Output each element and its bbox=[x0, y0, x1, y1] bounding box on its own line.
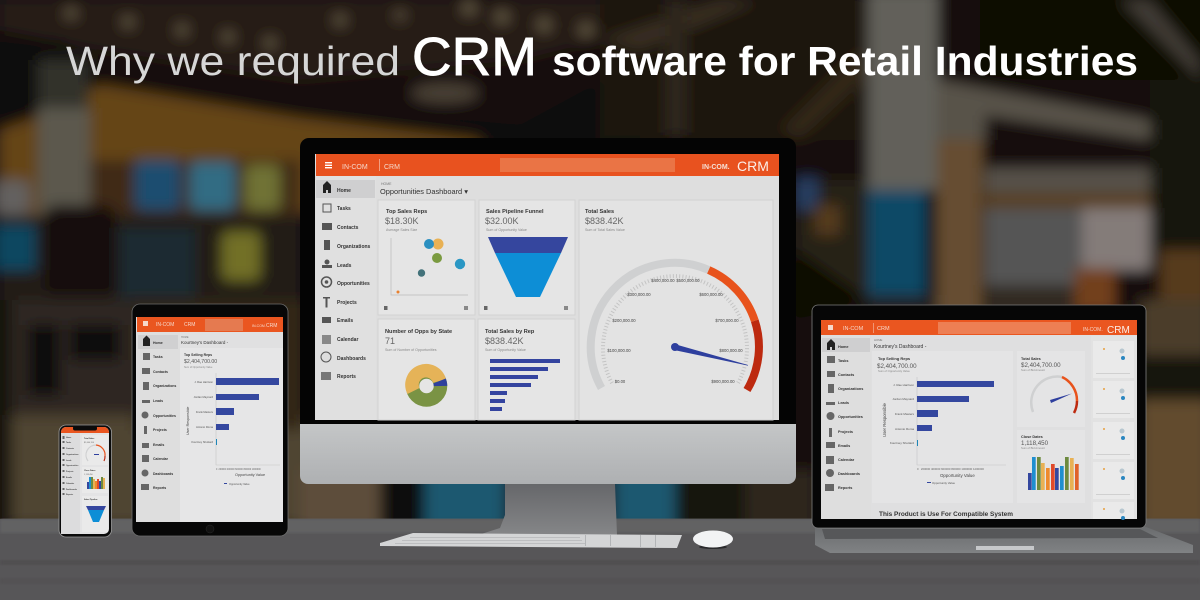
gauge chart: $900,000.00 bbox=[711, 379, 735, 384]
monitor chin bbox=[300, 424, 796, 484]
card: Total Sales gauge: $838.42K bbox=[585, 216, 624, 226]
card: Number of Opps by State: Number of Opps by State bbox=[385, 329, 452, 335]
tablet header: IN-COM. bbox=[252, 324, 266, 328]
tablet breadcrumb: HOME bbox=[181, 336, 189, 339]
tablet chart: Top Selling Reps: Frank Masters bbox=[196, 410, 214, 414]
device: desktop monitor bbox=[300, 138, 796, 535]
phone sidebar: Dashboards bbox=[66, 489, 77, 491]
phone header bbox=[61, 427, 109, 433]
laptop sidebar: Projects bbox=[838, 430, 853, 434]
title: CRM: CRM bbox=[412, 27, 537, 87]
laptop sidebar: Organizations bbox=[838, 387, 863, 391]
card: Top Sales Reps: Average Sales Size bbox=[386, 228, 417, 232]
laptop header: IN-COM. bbox=[1083, 327, 1103, 333]
monitor body bbox=[300, 138, 796, 484]
laptop keys bbox=[822, 529, 1158, 539]
sidebar navigation: Opportunities bbox=[337, 281, 370, 287]
laptop lid bbox=[812, 305, 1146, 528]
tablet chart: Top Selling Reps: Antonio Roma bbox=[196, 425, 214, 429]
laptop header bbox=[821, 320, 1137, 336]
title bbox=[66, 27, 1138, 87]
card: Sales Pipeline Funnel bbox=[479, 200, 575, 315]
tablet sidebar: Home bbox=[153, 341, 163, 345]
laptop thumbnails column bbox=[1091, 336, 1137, 520]
laptop sidebar bbox=[821, 335, 871, 519]
gauge chart: $0.00 bbox=[615, 379, 626, 384]
sidebar navigation: Home bbox=[337, 188, 351, 194]
title: bold words: software for Retail Industries bbox=[552, 38, 1138, 84]
tablet chart: Top Selling Reps: Opportunity Value bbox=[235, 473, 265, 477]
tablet breadcrumb: Kourtney's Dashboard - bbox=[181, 340, 229, 345]
tablet chart: Top Selling Reps: 0 200000 400000 600000 800000 1000000 bbox=[216, 469, 261, 471]
laptop card: Close Dates column chart: Close Dates bbox=[1021, 435, 1043, 439]
laptop card: Total Sales gauge: Total Sales bbox=[1021, 357, 1041, 361]
tablet sidebar: Contacts bbox=[153, 370, 168, 374]
app header bbox=[316, 154, 779, 176]
phone column chart bbox=[82, 467, 108, 493]
gauge chart: $500,000.00 bbox=[676, 278, 700, 283]
laptop sidebar: Contacts bbox=[838, 373, 854, 377]
laptop sidebar: Leads bbox=[838, 401, 849, 405]
laptop card: Total Sales gauge bbox=[1017, 351, 1085, 427]
tablet header: CRM bbox=[184, 322, 195, 328]
laptop card: Top Selling Reps bar chart: Kourtney Shuttard bbox=[890, 441, 914, 445]
sidebar navigation: Contacts bbox=[337, 225, 359, 231]
laptop card: Total Sales gauge: Sum of Bid Amount bbox=[1021, 368, 1045, 372]
tablet chart: Top Selling Reps bbox=[180, 348, 283, 522]
breadcrumb heading bbox=[380, 182, 468, 196]
sidebar navigation: Tasks bbox=[337, 206, 351, 212]
tablet chart: Top Selling Reps: Kourtney Shuttard bbox=[191, 440, 213, 444]
laptop card: Top Selling Reps bar chart: J. Rae Harrison bbox=[893, 383, 914, 387]
laptop sidebar: Calendar bbox=[838, 458, 855, 462]
phone sidebar: Calendar bbox=[66, 483, 74, 485]
tablet screen bbox=[136, 317, 283, 522]
card: Sales Pipeline Funnel: $32.00K bbox=[485, 216, 519, 226]
card: Top Sales Reps: Top Sales Reps bbox=[386, 209, 427, 215]
phone sidebar: Leads bbox=[66, 460, 71, 462]
card: Number of Opps by State: 71 bbox=[385, 336, 395, 346]
phone sidebar: Organizations bbox=[66, 453, 79, 456]
gauge chart: $100,000.00 bbox=[607, 348, 631, 353]
phone sidebar: Projects bbox=[66, 470, 73, 473]
laptop header: CRM bbox=[1107, 325, 1130, 336]
tablet sidebar: Calendar bbox=[153, 457, 169, 461]
tablet sidebar: Leads bbox=[153, 399, 163, 403]
phone sidebar: Home bbox=[66, 437, 71, 439]
monitor stand bbox=[478, 484, 617, 535]
title: thin words: Why we required bbox=[66, 38, 400, 84]
sidebar navigation: Leads bbox=[337, 263, 352, 269]
sidebar navigation: Reports bbox=[337, 374, 356, 380]
desk surface bbox=[0, 519, 1200, 600]
laptop card: Top Selling Reps bar chart: Jordan Maynard bbox=[892, 397, 914, 401]
sidebar navigation: Projects bbox=[337, 300, 357, 306]
tablet chart: Top Selling Reps: User Responsible bbox=[186, 407, 190, 435]
laptop card: Top Selling Reps bar chart: Sum of Opportunity Value bbox=[878, 369, 910, 373]
tablet chart: Top Selling Reps: Jordan Maynard bbox=[194, 395, 214, 399]
tablet sidebar: Projects bbox=[153, 428, 167, 432]
behind monitor stand bbox=[300, 470, 380, 530]
gauge chart bbox=[591, 263, 759, 390]
tablet header bbox=[137, 317, 283, 332]
phone column chart: Close Dates bbox=[84, 469, 96, 472]
funnel chart bbox=[488, 237, 568, 297]
laptop sidebar: Dashboards bbox=[838, 472, 860, 476]
sidebar navigation: Dashboards bbox=[337, 356, 366, 362]
phone gauge card: Total Sales bbox=[84, 437, 95, 440]
laptop card: Total Sales gauge: $2,404,700.00 bbox=[1021, 362, 1061, 369]
device: laptop bbox=[812, 305, 1193, 553]
card: Total Sales by Rep: $838.42K bbox=[485, 336, 524, 346]
bar chart bbox=[490, 359, 560, 411]
card: Total Sales by Rep: Sum of Opportunity Value bbox=[485, 348, 526, 352]
phone gauge card: $2,404,700 bbox=[84, 442, 95, 444]
laptop card: Top Selling Reps bar chart: Antonio Roma bbox=[895, 427, 914, 431]
app header: CRM bbox=[384, 164, 400, 171]
sidebar navigation: Calendar bbox=[337, 337, 358, 343]
phone gauge card bbox=[82, 435, 108, 465]
card: Number of Opps by State bbox=[378, 319, 475, 420]
laptop breadcrumb: HOME bbox=[874, 338, 883, 342]
phone column chart: 1,118,450 bbox=[84, 474, 94, 476]
tablet sidebar: Tasks bbox=[153, 355, 163, 359]
card: Top Sales Reps: $18.30K bbox=[385, 216, 419, 226]
phone sidebar: Opportunities bbox=[66, 464, 78, 467]
tablet chart: Top Selling Reps: J. Rae Harrison bbox=[194, 380, 214, 384]
sidebar navigation bbox=[316, 176, 376, 420]
card: Total Sales gauge: Total Sales bbox=[585, 209, 614, 215]
laptop card: Top Selling Reps bar chart bbox=[872, 351, 1013, 503]
breadcrumb heading: HOME bbox=[381, 182, 392, 186]
laptop card: Top Selling Reps bar chart: User Responsible bbox=[882, 402, 887, 437]
tablet sidebar: Organizations bbox=[153, 384, 176, 388]
tablet home button bbox=[206, 525, 214, 533]
laptop screen bbox=[821, 320, 1137, 520]
laptop card: Top Selling Reps bar chart: Opportunity Value bbox=[940, 473, 975, 478]
right side of store bbox=[600, 0, 870, 140]
tablet sidebar: Reports bbox=[153, 486, 166, 490]
tablet header: IN-COM bbox=[156, 322, 174, 328]
card: Total Sales by Rep bbox=[478, 319, 575, 420]
laptop breadcrumb: Kourtney's Dashboard - bbox=[874, 344, 927, 350]
laptop breadcrumb bbox=[874, 338, 927, 350]
trackpad lip bbox=[976, 546, 1034, 550]
card: Total Sales gauge bbox=[579, 200, 773, 420]
phone notch bbox=[73, 426, 97, 430]
shirts on shelf bbox=[135, 160, 180, 210]
tablet chart: Top Selling Reps: Top Selling Reps bbox=[184, 353, 212, 357]
phone screen bbox=[61, 426, 109, 534]
laptop base bbox=[815, 527, 1193, 553]
phone sidebar: Emails bbox=[66, 477, 72, 479]
sidebar navigation: Emails bbox=[337, 318, 353, 324]
phone sidebar: Tasks bbox=[66, 442, 71, 444]
card: Sales Pipeline Funnel: Sum of Opportunity Value bbox=[486, 228, 527, 232]
device: phone bbox=[59, 425, 112, 537]
card: Total Sales gauge: Sum of Total Sales Value bbox=[585, 228, 625, 232]
tablet sidebar: Dashboards bbox=[153, 472, 173, 476]
laptop header: CRM bbox=[877, 326, 890, 332]
tablet sidebar bbox=[137, 332, 180, 522]
laptop footer text: This Product is Use For Compatible System bbox=[879, 511, 1013, 518]
phone sidebar: Reports bbox=[66, 493, 73, 496]
device: tablet bbox=[132, 304, 288, 536]
laptop sidebar: Home bbox=[838, 345, 849, 349]
keyboard bbox=[380, 533, 682, 548]
laptop card: Close Dates column chart bbox=[1017, 430, 1085, 503]
card: Sales Pipeline Funnel: Sales Pipeline Funnel bbox=[486, 209, 544, 215]
card: Top Sales Reps bbox=[378, 200, 475, 315]
card: Number of Opps by State: Sum of Number of Opportunities bbox=[385, 348, 437, 352]
tablet sidebar: Emails bbox=[153, 443, 164, 447]
laptop sidebar: Reports bbox=[838, 486, 852, 490]
tablet breadcrumb bbox=[181, 336, 229, 345]
gauge chart: $700,000.00 bbox=[715, 318, 739, 323]
phone funnel card: Sales Pipeline bbox=[84, 499, 98, 501]
tablet sidebar: Opportunities bbox=[153, 414, 176, 418]
gauge chart: $300,000.00 bbox=[627, 292, 651, 297]
tablet header: CRM bbox=[266, 323, 277, 329]
sidebar navigation: Organizations bbox=[337, 244, 371, 250]
laptop card: Top Selling Reps bar chart: Top Selling Reps bbox=[878, 356, 911, 361]
app header: CRM bbox=[737, 158, 769, 174]
tablet chart: Top Selling Reps: Sum of Opportunity Value bbox=[184, 366, 213, 369]
laptop card: Top Selling Reps bar chart: $2,404,700.00 bbox=[877, 363, 917, 370]
laptop card: Close Dates column chart: Sum of Bid Amount bbox=[1021, 446, 1045, 450]
phone sidebar bbox=[61, 433, 80, 534]
gauge chart: $600,000.00 bbox=[699, 292, 723, 297]
monitor screen bbox=[315, 154, 779, 420]
tablet chart: Top Selling Reps: $2,404,700.00 bbox=[184, 359, 217, 365]
card: Total Sales by Rep: Total Sales by Rep bbox=[485, 329, 535, 335]
tablet chart: Top Selling Reps: Opportunity Value bbox=[229, 482, 250, 486]
laptop header: IN-COM bbox=[843, 326, 864, 332]
breadcrumb heading: Opportunities Dashboard ▾ bbox=[380, 187, 468, 196]
gauge chart: $400,000.00 bbox=[651, 278, 675, 283]
laptop card: Top Selling Reps bar chart: Frank Masters bbox=[895, 412, 914, 416]
laptop card: Close Dates column chart: 1,118,450 bbox=[1021, 440, 1049, 447]
donut chart bbox=[412, 371, 440, 400]
ceiling lights bbox=[65, 1, 593, 103]
gauge chart: $800,000.00 bbox=[719, 348, 743, 353]
laptop sidebar: Opportunities bbox=[838, 415, 863, 419]
app header: IN-COM bbox=[342, 164, 368, 171]
app header: IN-COM. bbox=[702, 164, 730, 171]
laptop card: Top Selling Reps bar chart: Opportunity Value bbox=[932, 481, 955, 485]
tablet body bbox=[132, 304, 288, 536]
laptop card: Top Selling Reps bar chart: 0 200000 400000 600000 800000 1000000 1200000 bbox=[917, 467, 984, 471]
laptop sidebar: Emails bbox=[838, 444, 850, 448]
phone sidebar: Contacts bbox=[66, 447, 74, 450]
gauge chart: $200,000.00 bbox=[612, 318, 636, 323]
phone body bbox=[59, 425, 112, 537]
laptop sidebar: Tasks bbox=[838, 359, 848, 363]
mouse bbox=[693, 530, 733, 549]
